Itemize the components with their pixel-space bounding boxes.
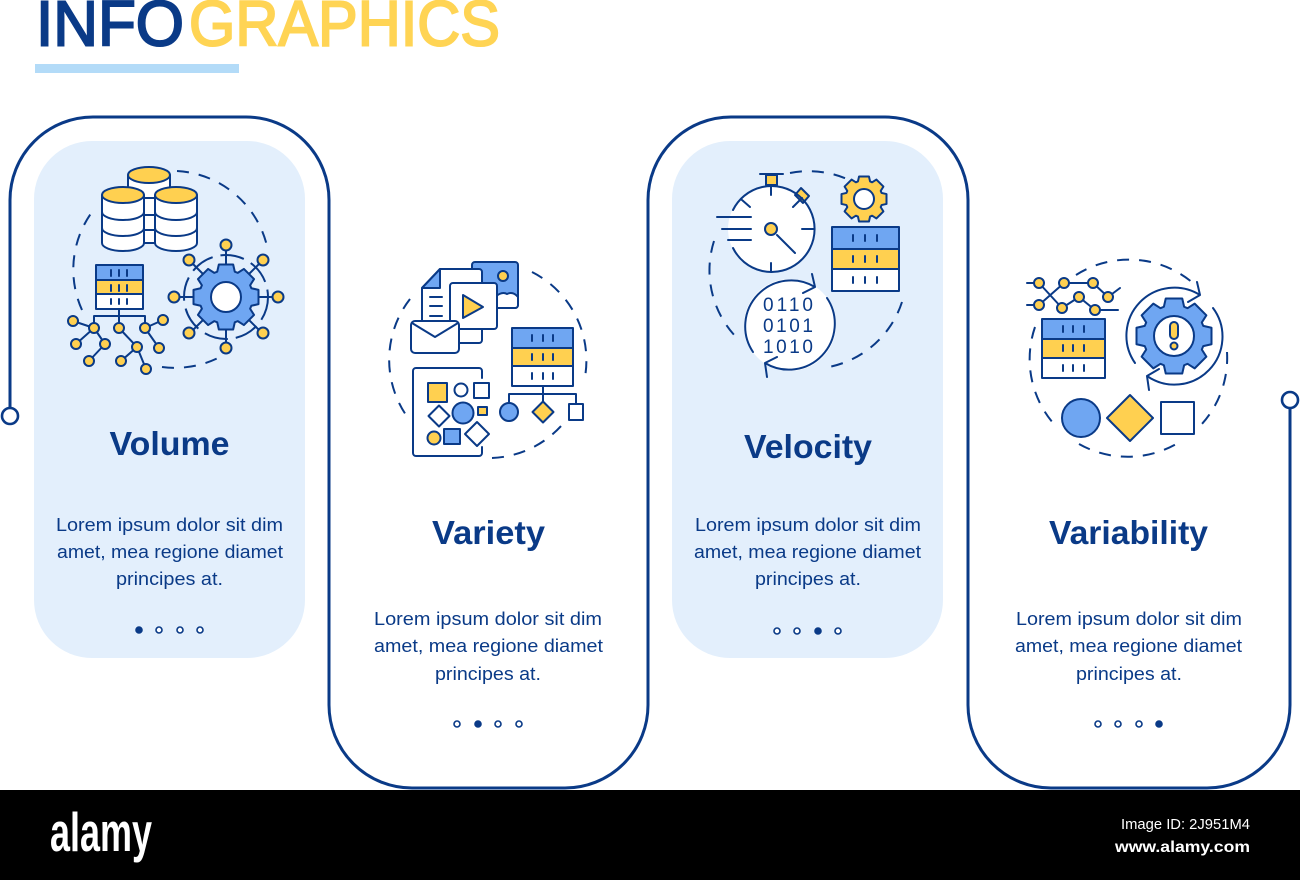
heading: Velocity: Velocity: [744, 428, 873, 465]
text block: amet, mea regione diamet: [57, 542, 283, 562]
footer bar: [0, 790, 1300, 880]
heading: Variability: Variability: [1049, 514, 1209, 551]
text block: amet, mea regione diamet: [694, 542, 921, 562]
pagination dots: [1095, 721, 1162, 727]
pagination dots: [136, 627, 203, 633]
panel backgrounds: [34, 141, 943, 658]
icon: stopwatch, gear, server and binary cycle: [709, 171, 902, 377]
icon: stopwatch, gear, server and binary cycle: 0110: [763, 295, 813, 316]
footer logo: alamy: [50, 801, 152, 863]
serpentine outline frame: [10, 117, 1290, 788]
icon: stopwatch, gear, server and binary cycle: 1010: [763, 337, 813, 358]
text block: [694, 515, 921, 589]
text block: principes at.: [1076, 664, 1182, 684]
text block: Lorem ipsum dolor sit dim: [1016, 609, 1242, 629]
heading: Volume: Volume: [110, 425, 230, 462]
text block: Lorem ipsum dolor sit dim: [56, 515, 283, 535]
frame end marker: [1282, 392, 1298, 408]
text block: Lorem ipsum dolor sit dim: [374, 609, 602, 629]
text block: [1015, 609, 1242, 684]
icon: files, server and shapes: [389, 262, 586, 458]
icon: stopwatch, gear, server and binary cycle: 0101: [763, 316, 813, 337]
text block: amet, mea regione diamet: [374, 636, 603, 656]
icon: databases, server and gear network: [68, 167, 284, 374]
website: www.alamy.com: [1114, 839, 1250, 856]
text block: principes at.: [435, 664, 541, 684]
column: Variability: [1015, 260, 1242, 727]
text block: principes at.: [755, 569, 861, 589]
text block: principes at.: [116, 569, 223, 589]
pagination dots: [454, 721, 522, 727]
title underline: [35, 64, 239, 73]
column: Velocity: [694, 171, 921, 634]
heading: Variety: Variety: [432, 514, 546, 551]
image id: Image ID: 2J951M4: [1121, 816, 1250, 833]
title: [36, 0, 500, 60]
column: Volume: [56, 167, 284, 633]
text block: amet, mea regione diamet: [1015, 636, 1242, 656]
pagination dots: [774, 628, 841, 634]
text block: [56, 515, 283, 589]
text block: Lorem ipsum dolor sit dim: [695, 515, 921, 535]
text block: [374, 609, 603, 684]
column: Variety: [374, 262, 603, 727]
icon: charts, server, alert gear and shapes: [1027, 260, 1227, 457]
frame start marker: [2, 408, 18, 424]
